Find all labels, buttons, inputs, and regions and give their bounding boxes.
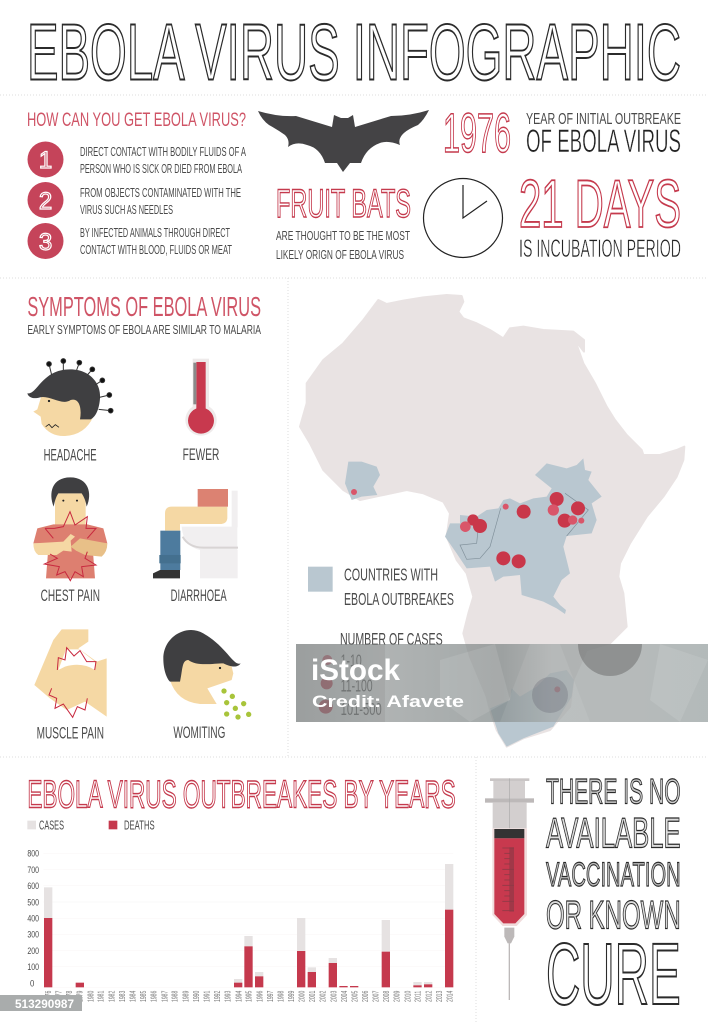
region: ivory coast (345, 462, 380, 500)
stat: 21 days (519, 166, 681, 263)
panel: fruit bats text: LIKELY ORIGN OF EBOLA VIRUS (276, 247, 404, 262)
panel: africa map (300, 295, 684, 747)
chart: x axis years: 2004 (340, 990, 349, 1002)
chart: y axis: 800 (27, 849, 39, 859)
chart: x axis years: 2010 (403, 990, 412, 1002)
step 1: DIRECT CONTACT WITH BODILY FLUIDS OF A (80, 144, 246, 159)
panel: how can you get ebola (27, 110, 246, 259)
icon: thermometer (185, 359, 217, 436)
chart: x axis years: 2013 (435, 990, 444, 1002)
chart: x axis years: 1996 (255, 990, 264, 1002)
legend: CASES (39, 819, 64, 833)
callout: there is no available vaccination or known cure (546, 772, 681, 1023)
step 2: VIRUS SUCH AS NEEDLES (80, 202, 173, 217)
chart: x axis years: 1979 (76, 990, 85, 1002)
chart: x axis years: 1977 (55, 990, 64, 1002)
icon: headache (27, 359, 113, 436)
chart: deaths bars (44, 910, 453, 987)
chart: x axis years: 2008 (382, 990, 391, 1002)
icon: chest pain (33, 477, 107, 581)
image id badge (0, 995, 82, 1011)
chart: x axis years: 1990 (192, 990, 201, 1002)
region: central africa (445, 458, 602, 614)
chart: x axis years: 2012 (424, 990, 433, 1002)
chart: y axis: 0 (30, 978, 34, 988)
image id badge: 513290987 (15, 999, 74, 1011)
chart: x axis years: 2005 (350, 990, 359, 1002)
chart: x axis years: 2001 (308, 990, 317, 1002)
chart: y axis: 300 (27, 930, 39, 940)
label: diarrhoea: DIARRHOEA (171, 587, 227, 605)
chart: y axis (27, 849, 39, 988)
chart: x axis years: 1983 (118, 990, 127, 1002)
chart: x axis years: 1981 (97, 990, 106, 1002)
watermark band (296, 644, 708, 722)
heading: symptoms: SYMPTOMS OF EBOLA VIRUS (27, 291, 261, 322)
chart: x axis years: 1976 (44, 990, 53, 1002)
icon: bat (258, 110, 429, 172)
icon: syringe (485, 778, 534, 1000)
chart: x axis years: 1994 (234, 990, 243, 1002)
panel: fruit bats text (276, 182, 411, 262)
chart: x axis years: 2014 (446, 990, 455, 1002)
outbreak markers (351, 489, 585, 692)
label: fewer: FEWER (183, 446, 219, 464)
legend: number of cases (319, 629, 443, 719)
chart: x axis years: 2011 (414, 990, 423, 1002)
icon: muscle pain (34, 629, 107, 717)
watermark band: Credit: Afavete (312, 692, 464, 711)
chart: cases bars (44, 864, 453, 985)
step 3: 3 (39, 229, 52, 256)
panel: symptoms (27, 291, 261, 743)
chart: x axis years: 1987 (160, 990, 169, 1002)
chart: x axis years: 1999 (287, 990, 296, 1002)
chart: x axis years: 1985 (139, 990, 148, 1002)
icon: clock (424, 178, 502, 258)
panel: fruit bats text: FRUIT BATS (276, 182, 411, 226)
stat: 1976 (443, 101, 681, 164)
panel: fruit bats text: ARE THOUGHT TO BE THE MOST (276, 228, 410, 243)
chart: x axis years: 1997 (266, 990, 275, 1002)
map: africa (300, 295, 684, 747)
legend: countries: COUNTRIES WITH (344, 565, 438, 585)
chart: x axis years: 2003 (329, 990, 338, 1002)
step 1: 1 (39, 147, 52, 174)
icon: womiting (163, 630, 251, 720)
chart: y axis: 400 (27, 914, 39, 924)
chart: x axis years (44, 990, 455, 1002)
chart: y axis: 700 (27, 865, 39, 875)
chart: x axis years: 1978 (65, 990, 74, 1002)
legend: DEATHS (124, 819, 155, 833)
legend: countries (308, 565, 454, 609)
chart: x axis years: 2009 (393, 990, 402, 1002)
chart: x axis years: 2007 (372, 990, 381, 1002)
icon: diarrhoea (153, 489, 238, 578)
step 2 (28, 182, 241, 218)
legend (27, 819, 155, 833)
heading: how can you get ebola: HOW CAN YOU GET EBOLA VIRUS? (27, 110, 246, 131)
chart: x axis years: 2002 (319, 990, 328, 1002)
step 1: PERSON WHO IS SICK OR DIED FROM EBOLA (80, 161, 242, 176)
chart: x axis years: 1989 (181, 990, 190, 1002)
chart: x axis years: 1982 (107, 990, 116, 1002)
chart: x axis years: 2000 (298, 990, 307, 1002)
legend: number of cases: 11-100 (341, 676, 373, 696)
stat: 1976: 1976 (443, 101, 511, 164)
watermark band: iStock (311, 654, 400, 687)
chart: x axis years: 1980 (86, 990, 95, 1002)
chart: x axis years: 1991 (202, 990, 211, 1002)
step 3 (28, 223, 232, 259)
label: headache: HEADACHE (44, 447, 97, 465)
chart: y axis: 200 (27, 946, 39, 956)
label: muscle pain: MUSCLE PAIN (37, 725, 104, 743)
label: chest pain: CHEST PAIN (41, 587, 100, 605)
region: south africa (490, 670, 574, 747)
legend: number of cases: 1-10 (341, 651, 362, 671)
label: womiting: WOMITING (173, 724, 225, 742)
chart: x axis years: 1995 (245, 990, 254, 1002)
subheading: EARLY SYMPTOMS OF EBOLA ARE SIMILAR TO MALARIA (27, 322, 261, 337)
panel: no vaccine (485, 772, 681, 1023)
chart: x axis years: 1992 (213, 990, 222, 1002)
legend: number of cases: 101-500 (341, 699, 382, 719)
chart: y axis: 500 (27, 897, 39, 907)
legend: countries: EBOLA OUTBREAKES (344, 589, 454, 609)
step 3: BY INFECTED ANIMALS THROUGH DIRECT (80, 225, 230, 240)
chart: x axis years: 1986 (150, 990, 159, 1002)
chart: y axis: 600 (27, 881, 39, 891)
chart: y axis: 100 (27, 962, 39, 972)
step 1 (28, 142, 246, 178)
panel: bar chart (27, 773, 456, 1002)
step 2: FROM OBJECTS CONTAMINATED WITH THE (80, 185, 241, 200)
chart: x axis years: 1988 (171, 990, 180, 1002)
chart: x axis years: 2006 (361, 990, 370, 1002)
chart: x axis years: 1998 (276, 990, 285, 1002)
legend: number of cases: NUMBER OF CASES (340, 629, 443, 649)
step 2: 2 (39, 188, 52, 215)
chart: x axis years: 1993 (224, 990, 233, 1002)
step 3: CONTACT WITH BLOOD, FLUIDS OR MEAT (80, 242, 232, 257)
chart: x axis years: 1984 (129, 990, 138, 1002)
